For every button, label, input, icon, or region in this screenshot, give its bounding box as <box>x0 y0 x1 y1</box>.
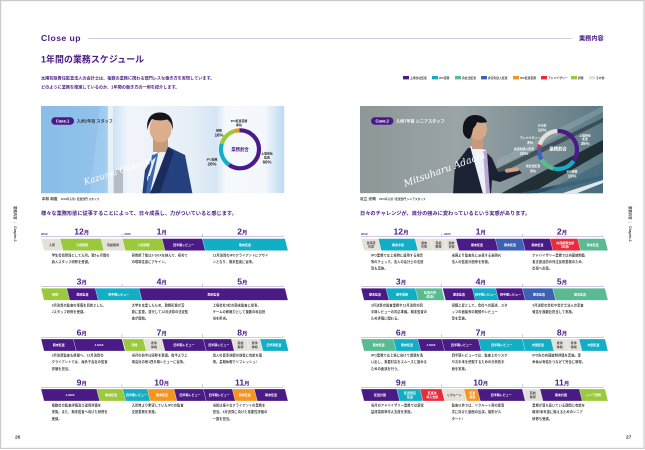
timeline: case 1 row 4: 担当。3月決算に向けた重要性評価の <box>213 409 267 414</box>
illustration: man in navy suit <box>142 112 192 194</box>
case 2 badge: 入所7年目 シニアスタッフ <box>396 118 444 124</box>
timeline: case 2 row 3: 四半期レビュー <box>451 342 472 347</box>
timeline: case 1 row 2: 勤に変更。並行して12月決算の法定監 <box>132 309 188 314</box>
timeline: case 2 row 4: 監査 <box>469 390 475 395</box>
timeline: case 2 row 1: 査支援目的の外注反復業務のため、 <box>532 259 585 264</box>
timeline: case 2 row 3: 夏季 <box>557 340 563 345</box>
title: 1年間の業務スケジュール <box>41 53 144 64</box>
side label right <box>627 206 633 242</box>
timeline: case 2 row 3: ための面談を行う。 <box>371 366 401 371</box>
timeline: case 2 row 4: 10月 <box>473 377 488 387</box>
timeline: case 2 row 1: 法人の監査計画等を実施。 <box>452 259 491 264</box>
timeline: case 2 row 3: 休暇 <box>571 344 577 349</box>
timeline: case 1 row 1: 四半期レビュー <box>173 242 194 247</box>
timeline: case 2 row 2: 四半期レビュー <box>500 291 521 296</box>
timeline: case 2 row 2: 期中業務 <box>396 291 408 296</box>
timeline: case 2 row 1: 期末監査 <box>504 242 516 247</box>
timeline: case 1 row 2: 査が開始。 <box>132 316 148 321</box>
timeline: case 2 row 3: IPO業務では上場に向けて課題を洗 <box>371 352 424 358</box>
timeline: case 1 row 3: 取得 <box>237 344 244 349</box>
heading: case 2: 日々のチャレンジが、自分の強みに変わっているという実感があります。 <box>360 209 530 217</box>
timeline: case 1 row 2: 4月 <box>157 277 167 287</box>
page number 26: 26 <box>15 435 21 441</box>
chart: case 2 donut: 10% <box>538 128 546 133</box>
timeline: case 1 row 4 <box>41 377 288 421</box>
timeline: case 2 row 4: 導入支援 <box>426 394 438 399</box>
timeline: case 2 row 2: 等を実施。 <box>452 316 468 321</box>
timeline: case 1 row 3: クライアントでは、海外子会社の監査 <box>52 359 108 364</box>
timeline: case 1 row 4: 期末監査 <box>156 392 168 397</box>
timeline: case 2 row 3: 続を実施。 <box>452 366 468 371</box>
timeline: case 2 row 1: 期末監査 <box>471 242 483 247</box>
chart: case 2 donut: 監査 <box>582 136 588 141</box>
timeline: case 2 row 1: 期末監査 <box>531 242 544 247</box>
timeline: case 1 row 2: 大学を卒業したため、勤務形態が常 <box>132 302 185 307</box>
timeline: case 2 row 1: アドバイザリー業務では内部統制監 <box>532 252 585 257</box>
timeline: case 2 row 3: IPO先の内部統制評価を実施。夏 <box>532 352 582 358</box>
legend: IPO業務 <box>439 76 450 80</box>
timeline: case 2 row 2: 報告を複数社担当して実施。 <box>532 309 575 314</box>
timeline: case 1 row 1: ンとなり、期末監査に従事。 <box>213 259 255 264</box>
timeline: case 1 row 4: 当初は様々なクライアントの業務を <box>213 402 265 408</box>
timeline: case 1 row 2: 期末監査 <box>76 291 89 296</box>
timeline: case 1 row 1: 有給取得 <box>107 242 119 247</box>
timeline: case 2 row 1: 内部統制支援 <box>556 240 574 245</box>
timeline: case 1 row 2: 期末監査 <box>207 291 220 296</box>
header: Close up <box>41 33 605 43</box>
timeline: case 1 row 3: 当月の前半は研修を受講。後半より上 <box>132 352 188 358</box>
timeline: case 2 row 3: 8月 <box>557 327 567 337</box>
case 2 caption: 足立 光晴 <box>360 196 376 201</box>
timeline: case 1 row 4: J-SOX <box>65 393 75 397</box>
timeline: case 1 row 3: 3月決算監査も終盤へ。12月決算の <box>52 352 104 358</box>
timeline: case 2 row 1: 出張へ出張。 <box>532 266 552 271</box>
timeline: case 1 row 3 <box>41 327 288 371</box>
header: Close up: 業務内容 <box>579 35 605 43</box>
timeline: case 2 row 1: 期末手続 <box>392 242 404 247</box>
case 1 caption: 2019年入所 / 監査部門 スタッフ <box>61 197 100 201</box>
timeline: case 1 row 4: 期末監査 <box>239 392 251 397</box>
timeline: case 2 row 4: 業務が落ち着いている期間に有給を <box>532 402 585 408</box>
case 1 badge: Case.1 <box>56 118 70 124</box>
timeline: case 2 row 4: 当月のアドバイザリー業務では新収 <box>371 402 425 408</box>
timeline: case 2 row 3: 季休は有給をつなげて完全に取得。 <box>532 359 585 364</box>
timeline: case 1 row 4: 受講。 <box>52 416 62 421</box>
timeline: case 2 row 4: 有給 <box>530 390 536 395</box>
signature: Kazuma Okazaki <box>82 156 154 188</box>
timeline: case 2 row 2: 監査合併 <box>424 289 436 294</box>
chart: case 2 donut: 3% <box>530 168 536 174</box>
timeline: case 2 row 2: 3月決算の監査業務や12月決算の四 <box>371 302 423 307</box>
panel: case 2 photo <box>360 106 603 194</box>
chart: case 1 donut: 業務割合 <box>231 146 249 153</box>
timeline: case 2 row 1: 米国より監査先に派遣する米国代 <box>452 252 502 257</box>
timeline: case 1 row 2: 当を担当。 <box>213 316 229 321</box>
case 1 caption: 中林 和嵩 <box>42 196 58 201</box>
timeline: case 1 row 4: 期末監査 <box>105 392 117 397</box>
timeline: case 1 row 3: 期末監査 <box>53 342 65 347</box>
timeline: case 2 row 3: 期末監査 <box>373 342 385 347</box>
chart: case 1 donut: IPO監査業務 <box>231 118 247 123</box>
timeline: case 2 row 2: 期末監査 <box>574 291 586 296</box>
panel: case 1 photo <box>41 106 284 194</box>
chart: case 2 donut: IPO業務 <box>567 168 577 174</box>
timeline: case 2 row 1: 合宿 <box>421 244 427 249</box>
timeline: case 2 row 3: 期末監査 <box>401 342 413 347</box>
timeline: case 2 row 1: 期末監査 <box>587 242 599 247</box>
timeline: case 2 row 4: 監査残高 <box>404 390 416 395</box>
chart: case 1 donut: 監査 <box>264 154 270 159</box>
timeline: case 2 row 2: 期末監査 <box>533 291 545 296</box>
timeline: case 1 row 1: 入所研修 <box>76 242 88 247</box>
timeline: case 2 row 2: 半期レビューの対応準備。期末監査の <box>371 309 427 314</box>
chart: case 2 donut: 業務割合 <box>549 146 567 153</box>
timeline: case 2 row 1: 2月 <box>557 227 567 237</box>
timeline: case 1 row 3: 四半期監査 <box>266 342 282 347</box>
timeline: case 2 row 2: 5月 <box>557 277 567 287</box>
case 2 badge: Case.2 <box>375 118 390 124</box>
timeline: case 2 row 3: 四半期レビューでは、監査上のリスク <box>452 352 508 358</box>
chart: case 1 donut: 20% <box>208 162 216 167</box>
side label left: Chapter.2 <box>13 226 17 242</box>
timeline: case 1 row 1: 2019 <box>41 232 48 236</box>
timeline: case 2 row 4: 監査 <box>407 394 413 399</box>
timeline: case 1 row 3: 研修 <box>131 342 138 347</box>
timeline: case 1 row 1: 2020 <box>124 232 131 236</box>
timeline: case 1 row 2: チームの即戦力として複数の科目担 <box>213 309 266 314</box>
timeline: case 2 row 1: 等のチェック。法人の会計士の支援 <box>371 259 424 264</box>
chart: case 2 donut: 3% <box>527 140 533 145</box>
timeline: case 1 row 4: 四半期レビュー <box>126 392 147 397</box>
timeline: case 2 row 4: 益認識基準導入支援を実施。 <box>371 409 414 414</box>
timeline: case 2 row 2 <box>361 277 608 321</box>
chart: case 1 donut: 4% <box>236 122 242 128</box>
timeline: case 2 row 4: 取得!来年度に備えるためのシニア <box>532 409 583 414</box>
timeline: case 2 row 3: 夏季 <box>571 340 577 345</box>
illustration: man in dark suit <box>453 115 522 194</box>
timeline: case 2 row 3: 7月 <box>476 327 486 337</box>
intro text: どのように業務を推進しているのか、1年間の働き方の一例を紹介します。 <box>41 83 179 89</box>
timeline: case 2 row 3: い出し、重要対応をスムーズに進める <box>371 359 427 364</box>
signature: Mitsuharu Adachi <box>401 150 487 190</box>
timeline: case 2 row 4: 9月 <box>396 377 406 387</box>
legend: 非営利法人監査 <box>488 76 508 80</box>
timeline: case 1 row 3: 休暇 <box>252 344 258 349</box>
timeline: case 1 row 2: 研修 <box>52 291 58 296</box>
timeline: case 2 row 4: 四半期レビュー <box>491 392 512 397</box>
timeline: case 1 row 2: 3月 <box>77 277 87 287</box>
chart: case 2 donut: 上場会社 <box>579 132 591 138</box>
timeline: case 1 row 2: 上場会社3社の期末監査に従事。 <box>213 302 261 307</box>
timeline: case 1 row 1: 期末監査 <box>239 242 251 247</box>
intro text: 太陽有限責任監査法人の会計士は、複数の業務に携わる部門レスな働き方を実現しています。 <box>41 74 214 80</box>
chart: case 2 donut: アドバイザリー <box>520 135 540 140</box>
timeline: case 1 row 1: 1月 <box>157 227 167 237</box>
chart: case 2 donut: その他 <box>538 122 546 128</box>
timeline: case 1 row 3: 6月 <box>77 327 87 337</box>
timeline: case 2 row 1: 1月 <box>476 227 486 237</box>
chart: case 1 donut <box>207 118 273 168</box>
chart: case 2 donut: 非営利法人監査 <box>514 146 534 151</box>
side label left: 業務内容 <box>13 206 18 220</box>
timeline: case 2 row 4: タート! <box>452 416 463 421</box>
timeline: case 2 row 2: (監査) <box>426 293 434 298</box>
timeline: case 1 row 1: の現場往査にアサイン。 <box>132 259 168 264</box>
chart: case 2 donut: 35% <box>581 141 589 146</box>
timeline: case 1 row 3: J-SOX <box>94 343 104 347</box>
timeline: case 2 row 1: 12月 <box>394 227 408 237</box>
timeline: case 2 row 4: 研修も受講。 <box>532 416 552 421</box>
case 1 caption <box>42 196 100 201</box>
timeline: case 2 row 2: 期末監査 <box>369 291 381 296</box>
timeline: case 1 row 4: 9月 <box>77 377 87 387</box>
timeline: case 2 row 4: 調査 <box>469 394 475 399</box>
timeline: case 1 row 3: 得。長期休暇でリフレッシュ! <box>213 359 257 364</box>
page number 27: 27 <box>626 435 632 441</box>
timeline: case 2 row 4: リクルート <box>447 392 462 397</box>
chart: case 2 donut <box>514 122 591 178</box>
timeline: case 2 row 3 <box>361 327 608 371</box>
case 1 badge <box>51 117 113 125</box>
legend: 上場会社監査 <box>410 76 427 80</box>
timeline: case 1 row 4: 四半期レビュー <box>179 392 201 397</box>
timeline: case 2 row 3: J-SOX <box>426 343 436 347</box>
timeline: case 1 row 3: 夏季 <box>151 340 157 345</box>
timeline: case 2 row 1: 2020 <box>444 232 451 236</box>
chart: case 2 donut: 会社法監査 <box>526 163 540 168</box>
timeline: case 2 row 3: 四半期レビュー <box>491 342 512 347</box>
chart: case 1 donut: 研修 <box>216 128 222 132</box>
timeline: case 1 row 2: 3月決算の監査の準備を目的とした、 <box>52 302 106 307</box>
case 2 caption: 2015年入所 / 監査部門 シニアスタッフ <box>379 197 426 201</box>
chart: case 2 donut: 10% <box>520 151 528 156</box>
timeline: case 2 row 4 <box>361 377 608 421</box>
timeline: case 1 row 4: 10月 <box>154 377 169 387</box>
timeline: case 2 row 1: 合算 <box>368 244 374 249</box>
chart: case 2 donut: 19% <box>568 174 576 178</box>
timeline: case 2 row 2: 役職上昇として、会社への面談、スタ <box>452 302 508 307</box>
legend: IPO監査業務 <box>520 76 536 80</box>
timeline: case 2 row 4: 監査先 <box>428 390 437 395</box>
legend: アドバイザリー <box>548 76 568 80</box>
timeline: case 1 row 3: 四半期レビュー <box>208 342 229 347</box>
timeline: case 2 row 1 <box>361 227 608 271</box>
header: Close up: Close up <box>41 33 81 43</box>
timeline: case 2 row 4: シニア研修 <box>586 392 601 397</box>
timeline: case 2 row 1: (監査) <box>561 244 569 249</box>
timeline: case 1 row 3: 休暇 <box>151 344 157 349</box>
timeline: case 1 row 1: 入所 <box>49 242 55 247</box>
timeline: case 2 row 3: 休暇 <box>557 344 563 349</box>
timeline: case 1 row 4: 複数社の監査評価及び運用評価を <box>52 402 101 408</box>
timeline: case 1 row 3: 有給 <box>237 340 244 345</box>
timeline: case 2 row 3: 内部監査 <box>587 342 600 347</box>
timeline: case 2 row 1: 等も実施。 <box>371 266 388 271</box>
timeline: case 1 row 3: 評価を担当。 <box>52 366 72 371</box>
timeline: case 1 row 1: 12月 <box>74 227 89 237</box>
timeline: case 1 row 2 <box>41 277 288 321</box>
side label left <box>12 206 18 242</box>
case 1 badge: 入所2年目 スタッフ <box>77 118 113 124</box>
timeline: case 1 row 3: 8月 <box>237 327 247 337</box>
timeline: case 1 row 1 <box>41 227 288 264</box>
timeline: case 2 row 3: やお手本を把握するための分析的手 <box>452 359 505 364</box>
timeline: case 1 row 4: 11月 <box>235 377 250 387</box>
legend: 会社法監査 <box>462 76 476 80</box>
timeline: case 2 row 4: 取得 <box>530 394 536 399</box>
timeline: case 1 row 4: 期末監査 <box>265 392 277 397</box>
timeline: case 1 row 1: 学生会員登録として入所。翌5ヵ月間の <box>52 252 110 257</box>
timeline: case 2 row 1: 有給 <box>435 240 442 245</box>
timeline: case 2 row 4: 監査以外では、リクルート用の受賞 <box>452 402 504 408</box>
timeline: case 1 row 1: 新人スタッフ研修を受講。 <box>52 259 91 264</box>
side label right: 業務内容 <box>628 206 633 220</box>
timeline: case 2 row 2: ッフの面接等の開催やレビュー <box>452 309 498 314</box>
timeline: case 2 row 1: 週末 <box>421 240 427 245</box>
timeline: case 1 row 1: 2月 <box>237 227 247 237</box>
chart: case 1 donut: IPO業務 <box>207 156 217 162</box>
timeline: case 1 row 3: 夏季 <box>252 340 258 345</box>
side label right: Chapter.2 <box>628 226 632 242</box>
timeline: case 2 row 2: 3月決算の会社や会計士法人の実査 <box>532 302 584 307</box>
timeline: case 2 row 1: 2019 <box>361 232 368 236</box>
timeline: case 2 row 4: 11月 <box>555 377 569 387</box>
timeline: case 1 row 3: 協人の夏季休暇の前後に有給を取 <box>213 352 263 358</box>
timeline: case 2 row 1: IPO業務では上場時に適用する場合 <box>371 252 424 257</box>
intro text <box>41 74 214 89</box>
timeline: case 2 row 2: 期末監査 <box>453 291 465 296</box>
timeline: case 1 row 3: 場会社の第1四半期レビューに従事。 <box>132 359 186 364</box>
timeline: case 2 row 1: 週末 <box>448 240 455 245</box>
chart: case 1 donut: 60% <box>263 159 271 164</box>
timeline: case 2 row 2: ため評価に関わる。 <box>371 316 401 321</box>
timeline: case 1 row 3: 7月 <box>157 327 167 337</box>
case 2 caption <box>360 196 426 201</box>
chart: case 1 donut: 16% <box>215 133 223 138</box>
heading: case 1: 様々な業務形態に従事することによって、日々成長し、力がついていると感じます。 <box>41 209 237 217</box>
timeline: case 1 row 2: Jスタッフ研修を受講。 <box>52 309 87 314</box>
timeline: case 2 row 4: 式に向けた動画の出演。撮影がス <box>452 409 501 414</box>
timeline: case 1 row 4: 入所時より希望していたIPOの監査 <box>132 402 184 408</box>
timeline: case 1 row 1: 入所研修 <box>138 242 150 247</box>
timeline: case 2 row 2: 四半期レビュー <box>475 291 496 296</box>
timeline: case 1 row 4: 支援業務を実施。 <box>132 409 158 414</box>
legend <box>403 76 605 80</box>
timeline: case 2 row 2: 3月 <box>396 277 406 287</box>
chart: case 1 donut: 上場会社 <box>261 150 273 156</box>
timeline: case 1 row 1: 研修終了後はJ-SOXを挟んで、初めて <box>132 252 188 257</box>
timeline: case 2 row 2: 4月 <box>476 277 486 287</box>
timeline: case 2 row 4: 期末計画 <box>555 392 567 397</box>
timeline: case 2 row 3: 6月 <box>396 327 406 337</box>
timeline: case 1 row 4: 一部を担当。 <box>213 416 233 421</box>
timeline: case 1 row 1: 12月決算のIPOクライアントにアサイ <box>213 252 268 257</box>
timeline: case 2 row 4: 監査計画 <box>374 392 386 397</box>
legend: 研修 <box>578 76 584 80</box>
timeline: case 1 row 4: 四半期レビュー <box>209 392 230 397</box>
legend: その他 <box>596 76 605 80</box>
timeline: case 2 row 1: 当年度 <box>366 240 376 245</box>
timeline: case 1 row 2: 四半期レビュー <box>108 291 129 296</box>
timeline: case 1 row 2: 5月 <box>237 277 247 287</box>
timeline: case 2 row 1: 取得 <box>435 244 442 249</box>
timeline: case 2 row 3: 内部監査 <box>532 342 544 347</box>
timeline: case 2 row 1: 合宿 <box>448 244 455 249</box>
timeline: case 1 row 4: 実施。また、期末監査へ向けた研修を <box>52 409 108 414</box>
case 2 badge <box>371 117 444 125</box>
timeline: case 1 row 3: 四半期レビュー <box>173 342 195 347</box>
